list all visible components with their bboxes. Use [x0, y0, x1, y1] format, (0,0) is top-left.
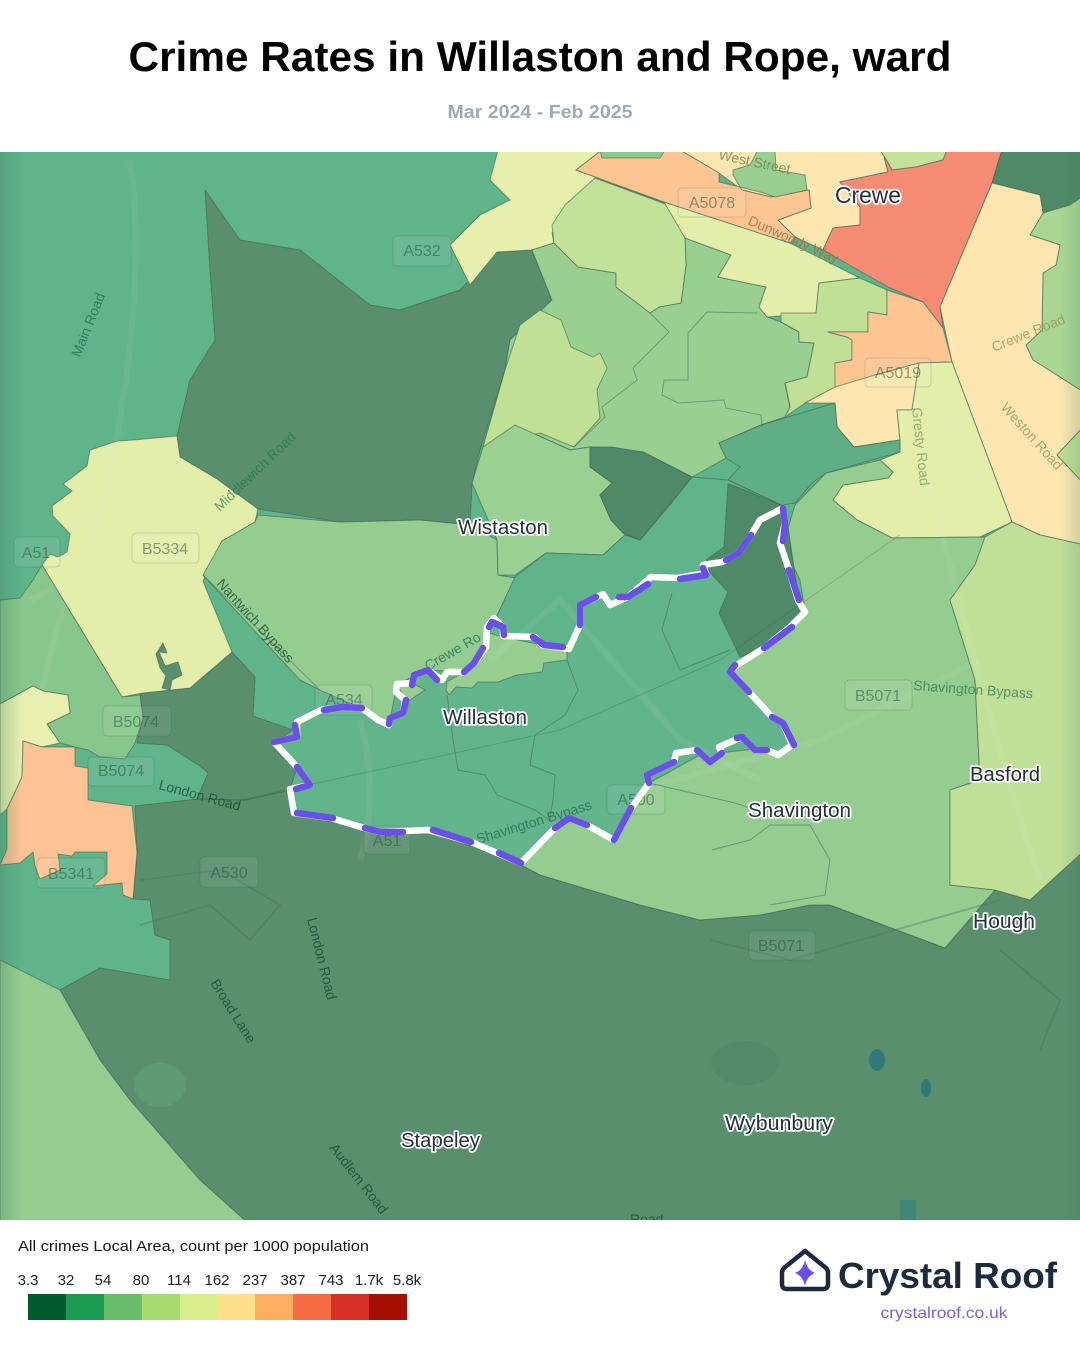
- road shields: B5341: [48, 866, 94, 883]
- ward inner boundaries: [203, 312, 830, 905]
- region: ward fill: [378, 590, 786, 829]
- region: north-east dark: [992, 150, 1080, 213]
- region: east light green: [521, 460, 995, 948]
- road shields: A5078: [689, 195, 735, 212]
- legend scale labels: 387: [280, 1272, 306, 1289]
- road shields: A534: [325, 692, 363, 709]
- region: B5334 yellow-green: [42, 436, 258, 697]
- region: Wistaston dark patch: [590, 447, 692, 540]
- region: Crewe north cream: [680, 150, 888, 250]
- region: lower orange: [828, 290, 952, 390]
- south lanes and ponds: [134, 870, 1060, 1220]
- region: small light patch: [397, 683, 425, 700]
- region: top small green strip: [600, 152, 664, 158]
- road name labels: Main Road: [68, 290, 108, 359]
- region: park olive: [552, 178, 686, 313]
- place name labels: Hough: [973, 911, 1035, 933]
- region: ward light patch: [446, 633, 567, 695]
- road shields: B5334: [142, 541, 188, 558]
- subtitle: date range: Mar 2024 - Feb 2025: [448, 102, 632, 122]
- region: teal north of ward: [496, 476, 796, 616]
- region: top-left yellow: [450, 150, 664, 285]
- legend scale labels: 3.3: [18, 1272, 38, 1289]
- ward boundary: white outline with purple dashes: [274, 508, 805, 863]
- region: ward east dark patch: [706, 508, 805, 657]
- legend: [18, 1238, 422, 1320]
- region: right olive sliver: [1056, 430, 1080, 480]
- region: Wistaston light green: [472, 425, 640, 575]
- legend scale labels: 114: [167, 1272, 191, 1289]
- place name labels: Stapeley: [401, 1130, 480, 1152]
- icon: house with star: [782, 1251, 828, 1289]
- road name labels: Broad Lane: [207, 976, 260, 1046]
- legend scale labels: 80: [133, 1272, 149, 1289]
- purple dashes: [274, 508, 799, 863]
- railway line through ward: [240, 535, 900, 800]
- region: east inner dark patch: [706, 484, 796, 582]
- road name labels: Shavington Bypass: [913, 677, 1033, 701]
- region: east margin light green: [1026, 190, 1080, 393]
- edge vignette: [0, 152, 1080, 1220]
- road name labels: London Road: [157, 776, 243, 814]
- logo: Crystal Roof: [782, 1251, 1058, 1322]
- region: Gresty yellow: [833, 362, 1012, 538]
- legend scale labels: 5.8k: [393, 1272, 422, 1289]
- subtle road network: [30, 160, 1040, 880]
- logo url: crystalroof.co.uk: [880, 1305, 1009, 1322]
- legend scale labels: 54: [95, 1272, 111, 1289]
- white outline: [274, 508, 805, 863]
- place name labels: Wybunbury: [725, 1113, 833, 1135]
- road name labels: Dunwoody Way: [746, 212, 841, 266]
- place name labels: Basford: [970, 764, 1040, 786]
- region: west orange: [0, 741, 137, 899]
- region: west of centre olive: [483, 310, 607, 447]
- region: Crewe upper orange: [576, 150, 811, 243]
- road shields: B5071: [758, 938, 804, 955]
- title: Crime Rates in Willaston and Rope, ward: [128, 33, 951, 80]
- road shields: A5019: [875, 365, 921, 382]
- road shields: [14, 188, 931, 960]
- road name labels: Crewe Ro: [422, 629, 484, 674]
- road name labels: Road: [630, 1211, 663, 1227]
- region: north-east teal: [719, 403, 900, 505]
- legend scale labels: 237: [242, 1272, 268, 1289]
- region: east cream: [940, 183, 1080, 545]
- logo wordmark: Crystal Roof: [838, 1255, 1058, 1296]
- region: north-west dark area: [177, 190, 552, 525]
- road shields: A532: [403, 243, 441, 260]
- road shields: A500: [617, 792, 655, 809]
- legend scale labels: 32: [58, 1272, 74, 1289]
- region: top olive patch: [880, 152, 946, 170]
- place name labels: Willaston: [443, 707, 527, 729]
- place name labels: Crewe: [835, 182, 901, 208]
- region: Dunwoody yellow band: [664, 202, 860, 317]
- road shields: A530: [210, 865, 248, 882]
- road name labels: Audlem Road: [327, 1140, 391, 1217]
- road name labels: [68, 146, 1067, 1227]
- region: West Street patch: [733, 150, 807, 197]
- road shields: A51: [373, 833, 401, 850]
- legend colour ramp: [28, 1294, 407, 1320]
- region: lower cream: [805, 363, 919, 447]
- road name labels: Weston Road: [998, 399, 1066, 473]
- place name labels: Shavington: [748, 800, 851, 822]
- road name labels: Shavington Bypass: [474, 797, 593, 847]
- region: central-north light green: [483, 238, 814, 477]
- region: Wistaston west light green: [203, 515, 515, 725]
- region: west mid light green: [0, 565, 143, 759]
- road name labels: West Street: [717, 146, 792, 177]
- place name labels: [401, 182, 1040, 1152]
- region: west yellow small: [0, 686, 70, 815]
- road shields: A51: [22, 545, 50, 562]
- road name labels: Nantwich Bypass: [214, 575, 298, 666]
- road shields: B5074: [113, 714, 159, 731]
- legend scale labels: 162: [204, 1272, 230, 1289]
- legend title: All crimes Local Area, count per 1000 population: [18, 1238, 369, 1255]
- road shields: B5071: [855, 688, 901, 705]
- road shields: B5074: [98, 763, 144, 780]
- region: Crewe red centre: [823, 150, 1002, 328]
- region: east yellow-green: [950, 522, 1080, 900]
- legend scale labels: [18, 1272, 422, 1289]
- road name labels: Crewe Road: [989, 311, 1067, 355]
- place name labels: Wistaston: [458, 517, 548, 539]
- road name labels: London Road: [304, 916, 340, 1001]
- road name labels: Middlewich Road: [211, 429, 299, 514]
- region: south dark area: [60, 790, 1080, 1225]
- region: west dark area: [137, 652, 297, 800]
- legend scale labels: 1.7k: [355, 1272, 384, 1289]
- region: north-east olive: [781, 278, 887, 417]
- road name labels: Gresty Road: [909, 407, 933, 486]
- legend scale labels: 743: [318, 1272, 344, 1289]
- icon: small dark enclave in yellow region: [156, 643, 182, 690]
- region: south-west light green: [0, 960, 250, 1225]
